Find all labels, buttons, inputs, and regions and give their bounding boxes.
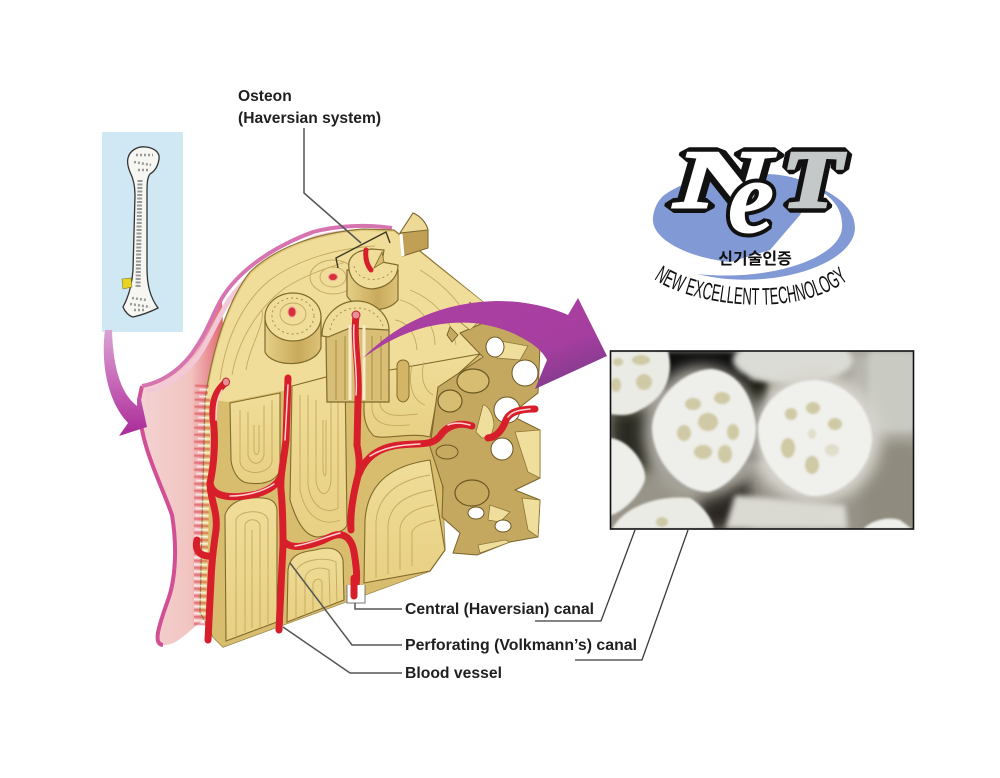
osteon label: (Haversian system) (238, 110, 381, 127)
panel: microscope photo of porous beads (610, 336, 920, 530)
osteon half cylinder middle (322, 301, 389, 402)
logo Korean text: 신기술인증 (718, 250, 792, 268)
panel: bone block illustration (139, 213, 483, 647)
osteon label: Osteon (238, 88, 292, 105)
periosteum fringe (197, 385, 207, 625)
icon: long bone (123, 147, 159, 317)
bead halos (749, 372, 881, 504)
central canal label: Central (Haversian) canal (405, 601, 594, 618)
logo ellipse (653, 174, 855, 280)
top surface (207, 231, 483, 402)
blurred background beads (728, 352, 856, 386)
logo T letter: T (782, 134, 845, 225)
osteon cylinder left (265, 293, 321, 364)
osteon leader line and bracket (304, 128, 390, 268)
logo e letter: e (728, 140, 774, 255)
arrow: bone to photo (363, 298, 607, 389)
osteon cylinder top (347, 249, 398, 310)
blood vessels (196, 311, 535, 640)
growth rings on top surface (220, 246, 475, 380)
panel: NeT logo: NEW EXCELLENT TECHNOLOGY (654, 266, 846, 305)
arrow: bone to periosteum (104, 330, 147, 436)
logo N letter (673, 134, 776, 225)
perforating canal label (290, 530, 688, 660)
spongy bone holes (468, 337, 538, 532)
osteon label (238, 88, 381, 127)
logo e letter: e (728, 140, 774, 255)
blood vessel label: Blood vessel (405, 665, 502, 682)
sharp beads (652, 369, 756, 492)
logo curved text (654, 276, 853, 305)
longitudinal osteon panels (225, 354, 480, 641)
central canal label (347, 530, 635, 621)
periosteum (139, 226, 392, 645)
icon: yellow sample marker (122, 278, 132, 289)
red ostial dot (328, 274, 338, 280)
bead pores (611, 355, 842, 527)
detached wedge (400, 213, 428, 256)
panel: spongy bone (430, 302, 540, 555)
perforating canal label: Perforating (Volkmann’s) canal (405, 637, 637, 654)
front faces (206, 353, 483, 647)
logo N letter: N (673, 134, 776, 225)
panel: whole bone inset (102, 132, 183, 332)
panel: NeT logo (652, 134, 855, 305)
logo N letter: N (673, 134, 776, 225)
compact bone body (200, 229, 483, 647)
logo T letter: T (782, 134, 845, 225)
blood vessel label (283, 627, 502, 682)
